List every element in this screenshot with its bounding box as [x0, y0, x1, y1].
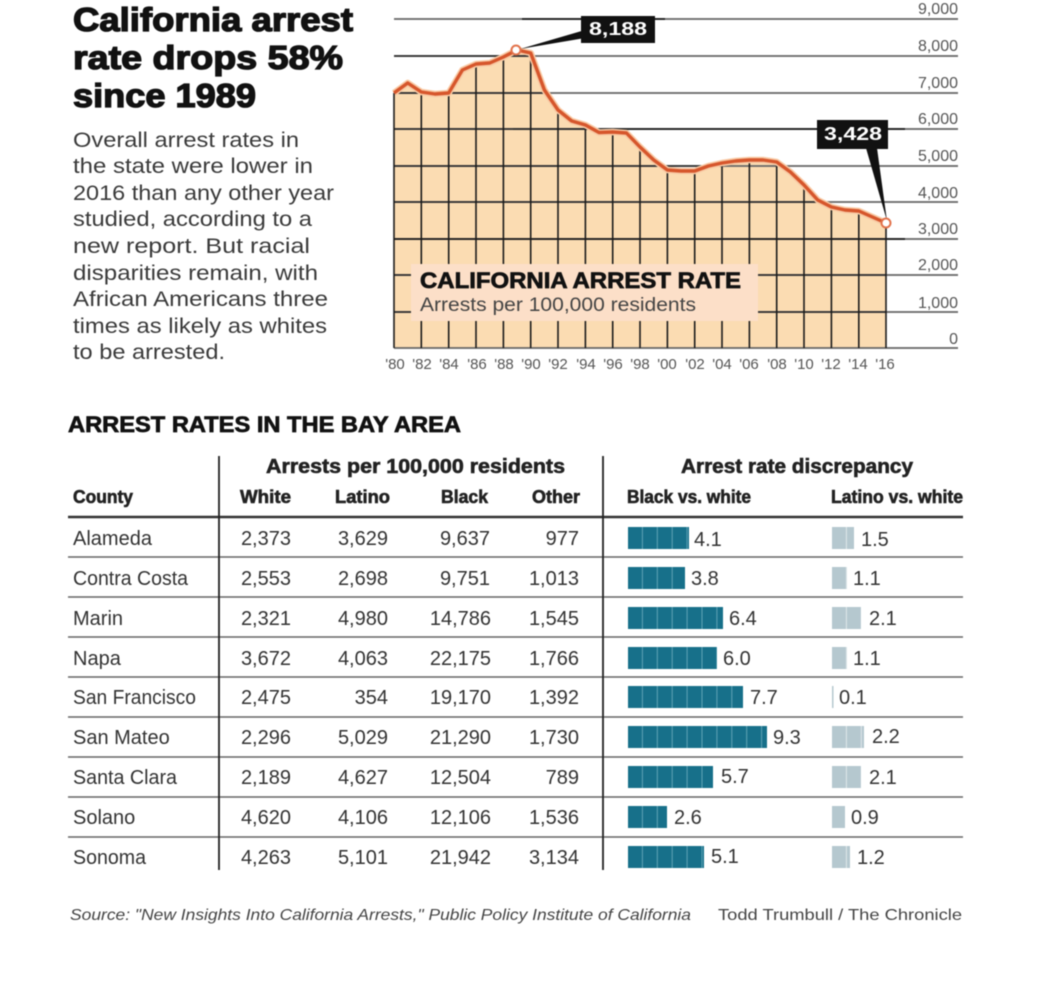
- credit line: Todd Trumbull / The Chronicle: [718, 907, 962, 924]
- y axis labels: 7,000: [918, 75, 958, 92]
- headline: [73, 1, 353, 114]
- row: San Francisco: 19,170: [430, 687, 491, 709]
- row: Sonoma: 1.2: [857, 847, 885, 869]
- intro text block: to be arrested.: [73, 341, 225, 364]
- x axis labels: '16: [875, 356, 895, 373]
- callout: 8,188: 8,188: [589, 19, 647, 39]
- row: Alameda: 2,373: [241, 528, 291, 550]
- row: Alameda: 977: [546, 528, 579, 550]
- table column headers: Other: [532, 487, 580, 507]
- row: San Mateo: 9.3: [773, 727, 801, 749]
- row: Solano: 4,620: [241, 807, 291, 829]
- row: Sonoma: 3,134: [529, 847, 579, 869]
- x axis labels: '92: [548, 356, 568, 373]
- section heading: ARREST RATES IN THE BAY AREA: [68, 412, 461, 437]
- x axis labels: '88: [494, 356, 514, 373]
- row: Solano: 1,536: [529, 807, 579, 829]
- row: Marin: 4,980: [338, 608, 388, 630]
- row: San Mateo: 5,029: [338, 727, 388, 749]
- y axis labels: 4,000: [918, 185, 958, 202]
- intro text block: 2016 than any other year: [73, 182, 334, 205]
- row: Marin: 6.4: [729, 608, 757, 630]
- x axis labels: '08: [767, 356, 787, 373]
- row: Napa: 4,063: [338, 648, 388, 670]
- row: San Mateo: 1,730: [529, 727, 579, 749]
- row: Marin: 2.1: [869, 608, 897, 630]
- row: Alameda: 9,637: [440, 528, 490, 550]
- row: Napa: 22,175: [430, 648, 491, 670]
- x axis labels: '94: [576, 356, 596, 373]
- row: Napa: 3,672: [241, 648, 291, 670]
- row: Marin: 2,321: [241, 608, 291, 630]
- table column headers: White: [240, 487, 291, 507]
- y axis labels: 5,000: [918, 148, 958, 165]
- row: Santa Clara: 5.7: [721, 766, 749, 788]
- intro text block: [73, 129, 334, 364]
- x axis labels: [385, 356, 895, 373]
- row: San Francisco: 2,475: [241, 687, 291, 709]
- intro text block: Overall arrest rates in: [73, 129, 299, 152]
- x axis labels: '80: [385, 356, 405, 373]
- table column headers: Latino vs. white: [831, 487, 963, 507]
- row: San Mateo: 2,296: [241, 727, 291, 749]
- x axis labels: '84: [439, 356, 459, 373]
- y axis labels: 1,000: [918, 295, 958, 312]
- row: San Mateo: [73, 726, 900, 749]
- intro text block: studied, according to a: [73, 208, 312, 231]
- intro text block: new report. But racial: [73, 235, 310, 258]
- row: Contra Costa: 1.1: [853, 568, 881, 590]
- row: Contra Costa: 2,553: [241, 568, 291, 590]
- row: San Mateo: 2.2: [872, 726, 900, 748]
- x axis labels: '00: [657, 356, 677, 373]
- row: Santa Clara: 2,189: [241, 767, 291, 789]
- row: Napa: 6.0: [723, 648, 751, 670]
- callout: 3,428: 3,428: [824, 124, 882, 144]
- table column headers: County: [73, 487, 133, 507]
- chart title panel: Arrests per 100,000 residents: [420, 295, 696, 316]
- x axis labels: '02: [685, 356, 705, 373]
- row: Solano: 12,106: [430, 807, 491, 829]
- x axis labels: '04: [712, 356, 732, 373]
- x axis labels: '98: [630, 356, 650, 373]
- row: Sonoma: 5,101: [338, 847, 388, 869]
- source line: Source: "New Insights Into California Arrests," Public Policy Institute of California: [70, 907, 691, 924]
- row: Santa Clara: 12,504: [430, 767, 491, 789]
- row: Contra Costa: 1,013: [529, 568, 579, 590]
- row: Sonoma: 21,942: [430, 847, 491, 869]
- area under the line: [394, 50, 886, 348]
- x axis labels: '86: [467, 356, 487, 373]
- row: Contra Costa: 2,698: [338, 568, 388, 590]
- y axis labels: 6,000: [918, 111, 958, 128]
- row: Napa: 1,766: [529, 648, 579, 670]
- headline: California arrest: [73, 1, 353, 38]
- table column headers: Arrest rate discrepancy: [681, 456, 914, 478]
- headline: rate drops 58%: [73, 39, 343, 76]
- row: Alameda: 3,629: [338, 528, 388, 550]
- row: San Francisco: 354: [355, 687, 388, 709]
- row: Napa: 1.1: [853, 648, 881, 670]
- row: San Francisco: 1,392: [529, 687, 579, 709]
- x axis labels: '06: [739, 356, 759, 373]
- y axis labels: 0: [949, 331, 958, 348]
- intro text block: African Americans three: [73, 288, 328, 311]
- row: Solano: 0.9: [851, 807, 879, 829]
- x axis labels: '10: [794, 356, 814, 373]
- callout: 3,428: [817, 120, 890, 228]
- y axis labels: 9,000: [918, 1, 958, 18]
- intro text block: disparities remain, with: [73, 262, 318, 285]
- row: Santa Clara: Santa Clara: [73, 767, 178, 789]
- intro text block: the state were lower in: [73, 155, 313, 178]
- row: Napa: [73, 647, 881, 670]
- y axis labels: 3,000: [918, 221, 958, 238]
- row: Marin: 1,545: [529, 608, 579, 630]
- row: San Francisco: [73, 686, 867, 709]
- row: Solano: 4,106: [338, 807, 388, 829]
- table column headers: Black vs. white: [627, 487, 751, 507]
- y axis labels: 8,000: [918, 38, 958, 55]
- line chart: California arrest rate: [385, 1, 958, 373]
- row: Sonoma: 5.1: [711, 846, 739, 868]
- row: Solano: [73, 806, 879, 829]
- row: Contra Costa: 3.8: [691, 568, 719, 590]
- row: Sonoma: 4,263: [241, 847, 291, 869]
- x axis labels: '12: [821, 356, 841, 373]
- row: Contra Costa: 9,751: [440, 568, 490, 590]
- row: Alameda: 1.5: [861, 529, 889, 551]
- row: Santa Clara: 789: [546, 767, 579, 789]
- headline: since 1989: [73, 77, 256, 114]
- row: San Francisco: San Francisco: [73, 687, 196, 709]
- x axis labels: '14: [848, 356, 868, 373]
- callout: 8,188: [512, 16, 655, 54]
- row: Napa: Napa: [73, 648, 122, 670]
- intro text block: times as likely as whites: [73, 315, 327, 338]
- row: Contra Costa: [73, 567, 881, 590]
- row: Marin: Marin: [73, 608, 123, 630]
- x axis labels: '90: [521, 356, 541, 373]
- table: arrest rates in the Bay Area: [68, 456, 963, 870]
- table column headers: Latino: [335, 487, 390, 507]
- arrest rate line: [394, 50, 886, 223]
- y axis labels: [918, 1, 958, 348]
- x axis labels: '96: [603, 356, 623, 373]
- table column headers: [73, 456, 963, 507]
- row: Marin: 14,786: [430, 608, 491, 630]
- row: San Francisco: 7.7: [750, 687, 778, 709]
- row: Alameda: Alameda: [73, 528, 153, 550]
- chart title panel: CALIFORNIA ARREST RATE: [420, 268, 741, 293]
- row: Alameda: 4.1: [694, 529, 722, 551]
- row: Santa Clara: [73, 766, 897, 789]
- row: Santa Clara: 4,627: [338, 767, 388, 789]
- row: Alameda: [73, 527, 889, 551]
- row: Marin: [73, 607, 897, 630]
- y axis labels: 2,000: [918, 257, 958, 274]
- row: Solano: 2.6: [674, 807, 702, 829]
- row: San Francisco: 0.1: [839, 687, 867, 709]
- table column headers: Arrests per 100,000 residents: [266, 456, 565, 478]
- row: San Mateo: 21,290: [430, 727, 491, 749]
- row: Sonoma: Sonoma: [73, 847, 147, 869]
- row: Contra Costa: Contra Costa: [73, 568, 189, 590]
- row: San Mateo: San Mateo: [73, 727, 170, 749]
- row: Sonoma: [73, 846, 885, 869]
- table column headers: Black: [441, 487, 489, 507]
- x axis labels: '82: [412, 356, 432, 373]
- chart title panel: [411, 264, 758, 321]
- row: Santa Clara: 2.1: [869, 767, 897, 789]
- row: Solano: Solano: [73, 807, 135, 829]
